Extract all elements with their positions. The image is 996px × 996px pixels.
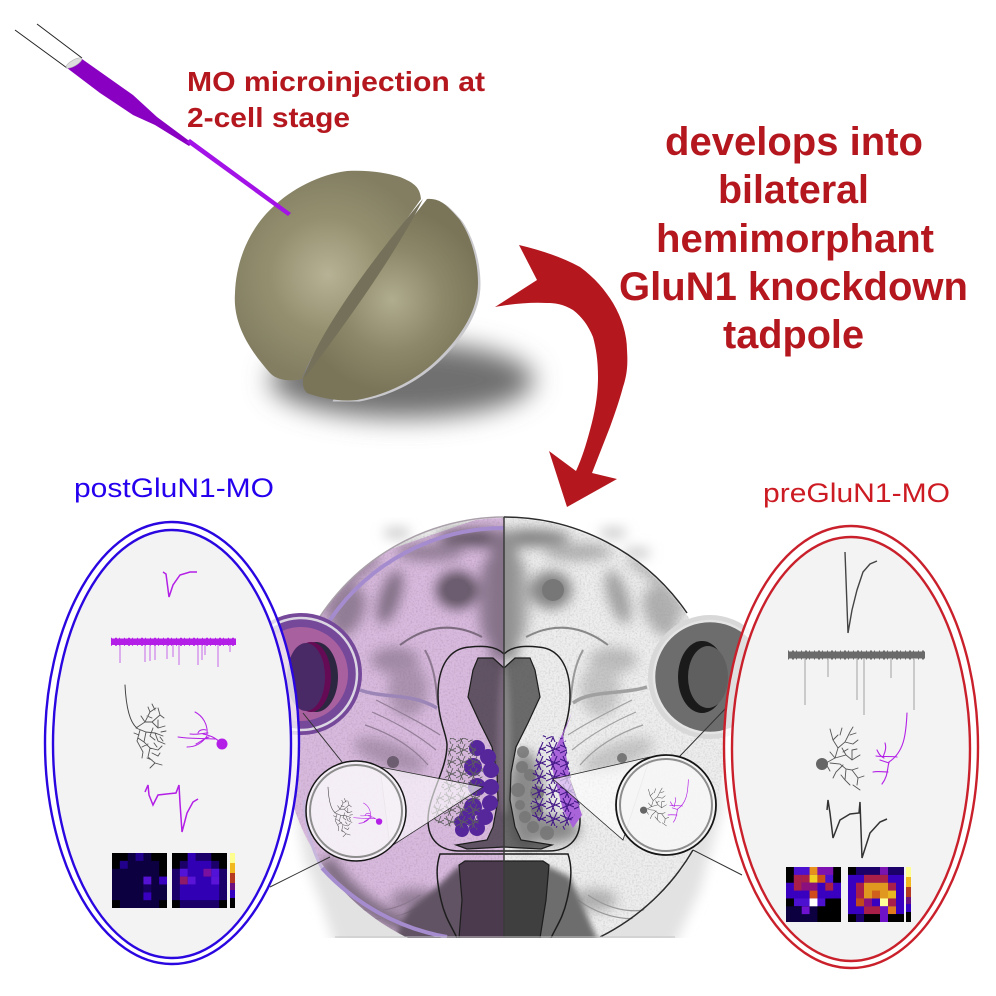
left zoom cone (380, 767, 483, 847)
heat map 1 (786, 867, 841, 922)
develops into heading: develops into (665, 120, 923, 164)
two-cell embryo (235, 171, 480, 402)
inset arbor grey (328, 787, 353, 837)
develops into heading: GluN1 knockdown (619, 265, 968, 309)
panel outlines (45, 522, 299, 964)
inset arbor magenta (354, 803, 382, 825)
pipette meniscus (65, 56, 83, 70)
midline (503, 517, 505, 938)
heat map 2 (172, 853, 227, 908)
inset right arbor magenta (668, 780, 688, 822)
microinjection caption (187, 66, 485, 133)
embryo right rim highlight (332, 200, 480, 402)
grey arbor (816, 727, 864, 790)
left head circle outline (304, 517, 504, 937)
left eye (240, 613, 362, 735)
panel: postGluN1-MO (45, 522, 299, 964)
right purple process (550, 713, 582, 828)
brain ventricle right fill (504, 658, 552, 849)
inset right arbor grey (640, 788, 669, 826)
cleavage furrow (304, 199, 423, 377)
nerve right (573, 687, 647, 703)
paired pulse trace (827, 800, 887, 858)
develops into heading (619, 120, 968, 357)
right head circle outline (504, 517, 693, 937)
develops into heading: tadpole (723, 313, 864, 357)
left brain cell bodies (454, 740, 499, 837)
heat map 2 (848, 867, 904, 922)
tissue folds (363, 626, 645, 920)
lower dark region left (395, 863, 462, 938)
right zoom cone (553, 757, 650, 840)
postGluN1-MO label: postGluN1-MO (74, 473, 274, 503)
microinjection caption: MO microinjection at (187, 66, 485, 97)
paired pulse trace (145, 785, 198, 832)
hindbrain inner left (459, 861, 504, 938)
colour scale (230, 853, 235, 908)
brain ventricle left fill (456, 658, 504, 849)
curved red arrow (495, 245, 627, 507)
panel outlines (724, 526, 978, 968)
microinjection caption: 2-cell stage (187, 102, 350, 133)
spontaneous current trace (788, 652, 925, 715)
spontaneous current trace (111, 638, 236, 667)
left grey arbor mesh (430, 738, 483, 830)
develops into heading: bilateral (718, 168, 869, 212)
EPSC trace (845, 552, 877, 633)
heat map 1 (112, 853, 167, 908)
top fuzz (383, 527, 651, 559)
EPSC trace (163, 572, 197, 597)
bottom edge (335, 936, 675, 938)
pipette glass walls (15, 24, 82, 68)
embryo left cell (235, 171, 421, 380)
lower dark region right (540, 863, 600, 938)
egg shadow (270, 342, 534, 418)
preGluN1-MO label: preGluN1-MO (763, 478, 950, 508)
right magnified circle (616, 755, 716, 855)
pipette purple fluid (67, 59, 192, 146)
head silhouette (296, 760, 722, 950)
right brain cell bodies (511, 746, 554, 840)
right eye (648, 615, 772, 739)
pipette tip (186, 139, 291, 216)
magenta arbor (873, 713, 907, 784)
hindbrain inner right (504, 861, 549, 938)
connector lines (270, 707, 742, 887)
tissue shading (323, 529, 685, 932)
right purple arbor mesh (530, 735, 580, 830)
purple half overlay (283, 510, 504, 938)
nostril pits (387, 579, 627, 768)
nerve left (360, 690, 437, 708)
colour scale (906, 867, 911, 922)
head base tissue (283, 510, 725, 950)
pipette barrel (15, 24, 192, 146)
tadpole head (283, 510, 725, 950)
left magnified circle (306, 761, 406, 861)
grey arbor (125, 685, 166, 768)
panel: preGluN1-MO (724, 526, 978, 968)
midline glow (497, 665, 511, 815)
brain outlines (428, 646, 580, 938)
develops into heading: hemimorphant (656, 217, 934, 261)
embryo right cell (303, 199, 478, 401)
magenta arbor (178, 712, 228, 750)
